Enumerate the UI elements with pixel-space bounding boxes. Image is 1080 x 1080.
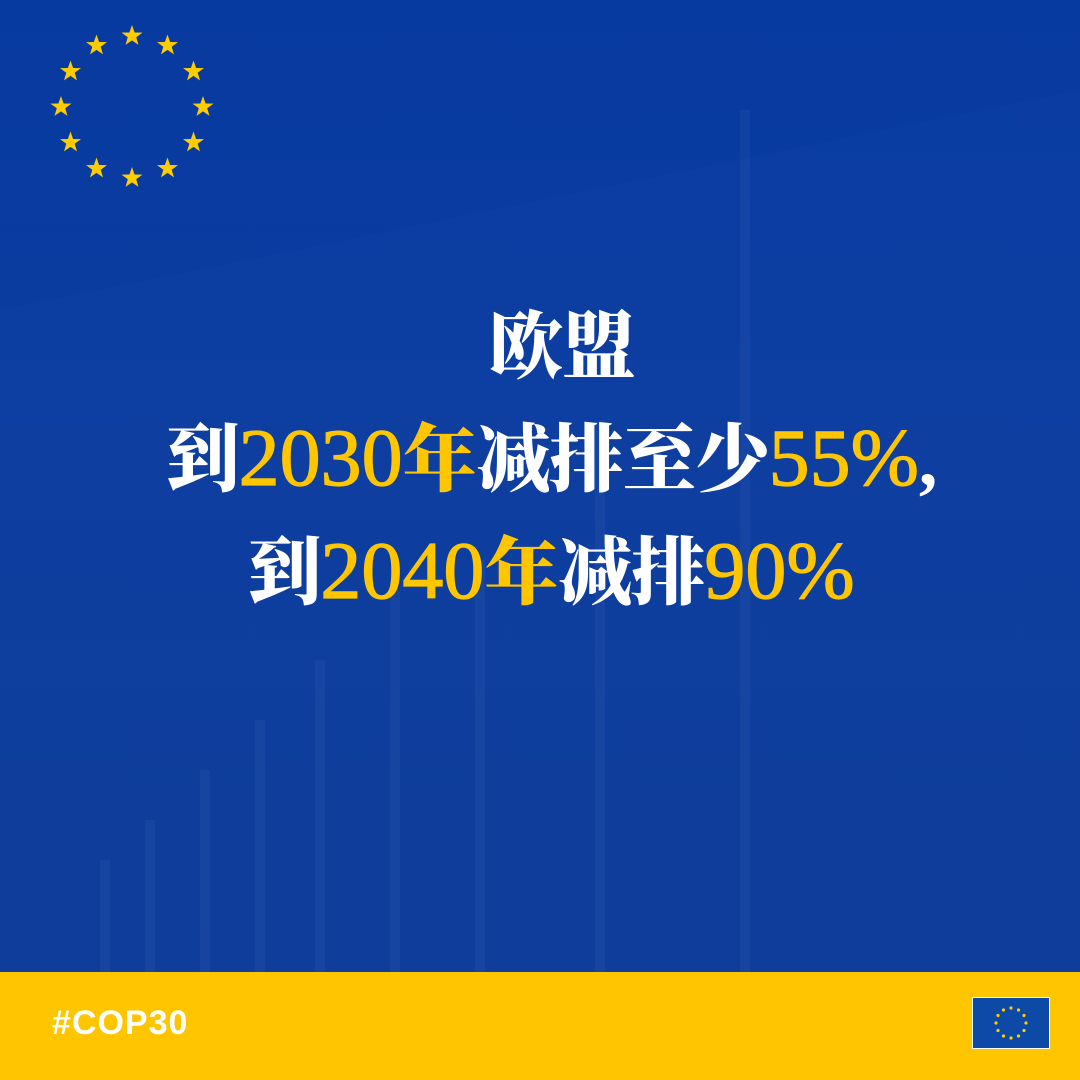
hashtag: #COP30	[52, 1004, 188, 1042]
title: 到2030年减排至少55%,	[166, 412, 936, 503]
title	[166, 307, 936, 616]
icon: EU flag	[972, 997, 1050, 1049]
title: 欧盟	[489, 307, 635, 389]
footer bar	[0, 972, 1080, 1080]
icon: EU stars circle	[50, 25, 214, 187]
title: 到2040年减排90%	[247, 525, 855, 616]
